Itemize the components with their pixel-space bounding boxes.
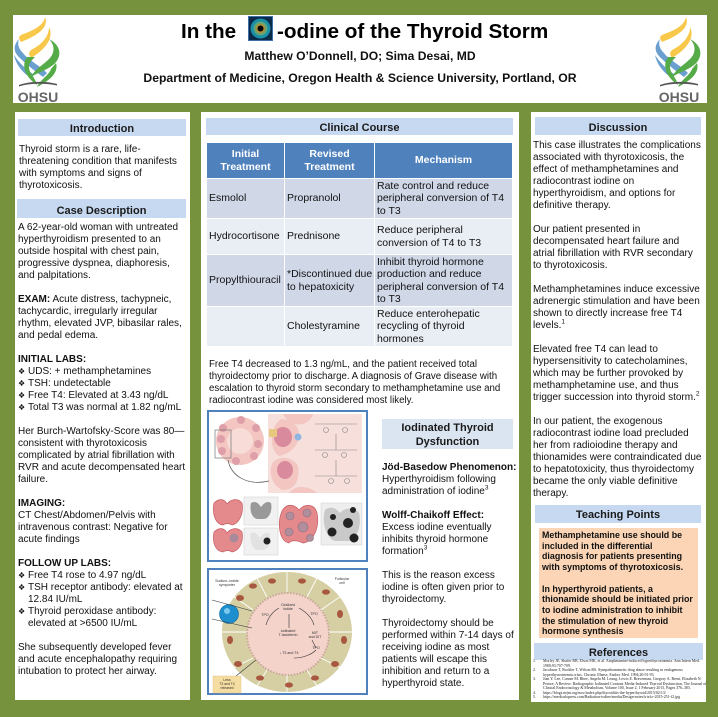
text: case description: CT Chest/Abdomen/Pelvis with (18, 510, 156, 521)
logo: OHSU right (655, 17, 700, 103)
text: introduction: Thyroid storm is a rare, life- (19, 144, 141, 155)
table: treatments: peripheral conversion of T4 (377, 192, 504, 204)
callout: teaching points: thionamide should be initiated prior (542, 594, 693, 604)
table: treatments: Esmolol (209, 192, 246, 204)
header banner (13, 15, 707, 103)
heading: Teaching Points (535, 505, 701, 523)
text: discussion: radiocontrast iodine load precluded (533, 428, 689, 439)
table: treatments: Reduce peripheral (377, 224, 463, 236)
text: case description: acute findings (18, 534, 80, 545)
text: outcome: Free T4 decreased to 1.3 ng/mL, and the patient received total (209, 359, 477, 370)
figure: thyroid hormone synthesis: ↓ T3 and T4 (279, 651, 299, 655)
text: references: 1980;93:707-709. (543, 664, 571, 668)
text: case description: consistent with thyrotoxicosis (18, 438, 147, 449)
figure: thyroid hormone synthesis: Follicular (335, 577, 350, 581)
text: case description: 12.84 IU/mL (28, 594, 82, 605)
text: case description: ❖ (18, 367, 25, 376)
text: discussion: effect of methamphetamines and (533, 164, 678, 175)
table: treatments: to T3 (377, 293, 401, 305)
text: case description: Her Burch-Wartofsky-Score was 80— (18, 426, 184, 437)
text: discussion: associated with thyrotoxicosis, the (533, 152, 684, 163)
text: case description: Thyroid peroxidase antibody: (28, 606, 156, 617)
figure: thyroid hormone synthesis: cell (339, 581, 345, 585)
text: discussion: radiocontrast iodine on (533, 176, 634, 187)
text: case description: ❖ (18, 583, 25, 592)
text: case description: complicated by atrial fibrillation with (18, 450, 175, 461)
text: iodine effects: performed within 7-14 days of (382, 630, 514, 641)
callout: teaching points: In hyperthyroid patients, a (542, 584, 653, 594)
text: references (533, 659, 706, 699)
text: discussion: thionamides were contraindicated due (533, 452, 701, 463)
text: case description: outside hospital with chest pain, (18, 246, 159, 257)
text: iodine effects: receiving iodine as most (382, 642, 489, 653)
text: discussion: methamphetamine use, and thus (533, 380, 679, 391)
text: case description: IMAGING: (18, 498, 65, 509)
panel: right column (531, 112, 706, 702)
text: case description: Total T3 was normal at 1.82 ng/mL (28, 402, 181, 413)
figure: thyroid hormone synthesis: released (220, 686, 234, 690)
table: treatments: peripheral conversion of T4 (377, 280, 504, 292)
text: case description: failure. (18, 474, 48, 485)
text: case description: elevated at >6500 IU/mL (28, 618, 137, 629)
callout: teaching points: with symptoms of thyrotoxicosis. (542, 562, 683, 572)
table: treatments: Treatment (304, 160, 355, 172)
text: case description: UDS: + methamphetamines (28, 366, 151, 377)
heading: Teaching Points: Teaching Points (576, 509, 660, 521)
figure: thyroid hormone synthesis: TPO (312, 646, 320, 650)
text: case description: and pedal edema. (18, 330, 98, 341)
text: introduction (19, 144, 177, 191)
heading: Introduction (18, 119, 186, 136)
callout: teaching points: Methamphetamine use should be (542, 530, 682, 540)
figure: thyroid hormone synthesis (207, 568, 368, 695)
table: treatments: Prednisone (287, 230, 340, 242)
text: iodine effects (382, 462, 516, 689)
text: outcome: thyroidectomy prior to discharge. A diagnosis of Grave disease with (209, 371, 497, 382)
text: discussion: hypersensitivity to catecholamines, (533, 356, 688, 367)
table: treatments: Rate control and reduce (377, 180, 489, 192)
text: iodine effects: Thyroidectomy should be (382, 618, 494, 629)
table: treatments: Treatment (220, 160, 271, 172)
affiliation: Department of Medicine, Oregon Health & Science University, Portland, OR (143, 71, 577, 85)
table: treatments: Propranolol (287, 192, 341, 204)
table: treatments: Revised (309, 148, 350, 160)
icon: iris (248, 16, 273, 41)
text: iodine effects: Jöd-Basedow Phenomenon: (382, 462, 516, 473)
figure: thyroid hormone synthesis: T3 and T4 (219, 682, 235, 686)
table: treatments: Reduce enterohepatic (377, 308, 480, 320)
heading: Clinical Course: Clinical Course (319, 122, 400, 134)
callout: teaching points: included in the differential (542, 541, 652, 551)
figure: thyroid hormone synthesis: iodide (283, 607, 293, 611)
text: iodine effects: thyroidectomy. (382, 594, 446, 605)
text: case description: RVR and acute decompensated heart (18, 462, 185, 473)
text: iodine effects: inhibition and return to a (382, 666, 489, 677)
title: In the (181, 20, 236, 43)
text: discussion: therapy. (533, 488, 568, 499)
text: case description: intubation to protect her airway. (18, 666, 157, 677)
text: discussion: to hepatotoxicity, thus thyroidectomy (533, 464, 694, 475)
text: iodine effects: patients will escape this (382, 654, 487, 665)
text: discussion: definitive therapy. (533, 200, 611, 211)
table: treatments: Inhibit thyroid hormone (377, 256, 484, 268)
text: case description: ❖ (18, 571, 25, 580)
table: treatments: Initial (232, 148, 259, 160)
text: references: 4. (533, 691, 536, 695)
text: outcome: radiocontrast iodine was considered most likely. (209, 395, 413, 406)
table: treatments (207, 143, 512, 346)
text: case description: TSH receptor antibody: elevated at (28, 582, 183, 593)
text: discussion: to thyrotoxicosis. (533, 260, 607, 271)
figure: thyroid hormone synthesis: TPO (310, 612, 318, 616)
text: iodine effects: hyperthyroid state. (382, 678, 464, 689)
text: iodine effects: formation3 (382, 545, 427, 557)
table: treatments: recycling of thyroid (377, 320, 465, 332)
text: iodine effects: administration of iodine3 (382, 485, 488, 497)
text: discussion: atrial fibrillation with RVR secondary (533, 248, 693, 259)
figure: thyroid follicle and scans (207, 410, 368, 562)
figure: thyroid hormone synthesis: Sodium–iodide (215, 579, 239, 583)
text: references: https://blogs.nejm.org/now/index.php/thyroiditis-the-hyperthyroid/2015/02/13/ (543, 691, 666, 695)
text: discussion: became the only viable definitive (533, 476, 678, 487)
callout: teaching points (539, 528, 698, 638)
table: treatments: to T3 (377, 205, 401, 217)
text: introduction: with symptoms and signs of (19, 168, 142, 179)
text: case description: intravenous contrast: Negative for (18, 522, 168, 533)
text: introduction: thyrotoxicosis. (19, 180, 82, 191)
callout: teaching points: hormone synthesis (542, 626, 623, 636)
text: references: 5. (533, 695, 536, 699)
text: case description: EXAM: Acute distress, tachypneic, (18, 294, 171, 305)
text: case description: ❖ (18, 403, 25, 412)
heading: Case Description (17, 199, 186, 218)
text: discussion: shown to directly increase free T4 (533, 308, 682, 319)
text: iodine effects: Wolff-Chaikoff Effect: (382, 510, 484, 521)
text: references: Jian Y. Lee, Connie M. Rhee, Angela M. Leung, Lewis E. Braverman, Gregory A. Brent, Elizabeth N. (543, 677, 702, 681)
text: references: 2. (533, 668, 536, 672)
text: discussion: This case illustrates the complications (533, 140, 701, 151)
text: case description: ❖ (18, 379, 25, 388)
figure: thyroid hormone synthesis: MIT (312, 631, 319, 635)
text: case description: rhythm, elevated JVP, bibasilar rales, (18, 318, 182, 329)
text: iodine effects: Excess iodine eventually (382, 522, 492, 533)
figure: thyroid hormone synthesis: TPO (261, 613, 269, 617)
text: discussion: hyperthyroidism, and options for (533, 188, 675, 199)
table: treatments: hormones (377, 333, 424, 345)
text: case description: She subsequently developed fever (18, 642, 171, 653)
heading: Introduction: Introduction (70, 123, 134, 135)
callout: teaching points: to iodine administration to inhibit (542, 605, 683, 615)
text: references: Morley JE, Shafer RB, Elson MK, et al. Amphetamine-induced hyperthyroxinemia. Ann Intern Med. (543, 659, 700, 663)
text: discussion: adrenergic stimulation and have been (533, 296, 700, 307)
text: references: Clinical Endocrinology & Metabolism, Volume 100, Issue 2, 1 February 2015, Pages 376–383. (543, 686, 691, 690)
text: discussion: Methamphetamines induce excessive (533, 284, 700, 295)
text: case description: INITIAL LABS: (18, 354, 86, 365)
callout: teaching points: the stimulation of new thyroid (542, 616, 668, 626)
text: discussion: her from radioiodine therapy and (533, 440, 678, 451)
text: discussion: which may be further provoked by (533, 368, 683, 379)
text: iodine effects: This is the reason excess (382, 570, 495, 581)
text: discussion: trigger succession into thyroid storm.2 (533, 391, 699, 403)
heading: Iodinated Thyroid Dysfunction: Iodinated Thyroid (401, 422, 494, 434)
text: discussion: levels.1 (533, 319, 565, 331)
table: treatments: production and reduce (377, 268, 482, 280)
text: case description (18, 222, 186, 677)
text: references: 3. (533, 677, 536, 681)
text: outcome (209, 359, 500, 406)
text: case description: hyperthyroidism presented to an (18, 234, 161, 245)
text: iodine effects: inhibits thyroid hormone (382, 534, 488, 545)
text: references: Jacobson T, Rockler T, Wilson RS. Sympathomimetic drug abuse resulting in endogenous (543, 668, 683, 672)
figure: thyroid hormone synthesis: Iodinated (281, 629, 295, 633)
heading: Discussion (535, 117, 701, 135)
text: introduction: threatening condition that manifests (19, 156, 177, 167)
figure: thyroid hormone synthesis: and DIT (309, 635, 322, 639)
heading: References (534, 643, 703, 660)
text: case description: Free T4 rose to 4.97 ng/dL (28, 570, 146, 581)
text: case description: ❖ (18, 391, 25, 400)
figure: thyroid hormone synthesis: symporter (219, 583, 236, 587)
text: discussion: decompensated heart failure and (533, 236, 679, 247)
text: case description: and palpitations. (18, 270, 91, 281)
figure: thyroid hormone synthesis: Oxidized (281, 603, 295, 607)
text: discussion: Elevated free T4 can lead to (533, 344, 658, 355)
figure: thyroid hormone synthesis: T lactoferrin (279, 633, 297, 637)
heading: Clinical Course (206, 118, 513, 135)
table: treatments: *Discontinued due (287, 268, 372, 280)
text: case description: Free T4: Elevated at 3.43 ng/dL (28, 390, 168, 401)
text: iodine effects: iodine is often given prior to (382, 582, 504, 593)
text: case description: progressive dyspnea, diaphoresis, (18, 258, 170, 269)
table: treatments: Hydrocortisone (209, 230, 280, 242)
text: references: https://medicalxpress.com/Radiation-iodine/media/Design-notes/iris/io-2015-251-f2.jpg (543, 695, 680, 699)
heading: Iodinated Thyroid Dysfunction: Dysfunction (416, 436, 479, 448)
text: references: Pearce; A Review: Radiographic Iodinated Contrast Media-Induced Thyroid Dysfunction, The Journal of (543, 682, 706, 686)
text: case description: TSH: undetectable (28, 378, 111, 389)
text: outcome: escalation to thyroid storm secondary to methamphetamine use and (209, 383, 500, 394)
table: treatments: Propylthiouracil (209, 274, 281, 286)
text: discussion: In our patient, the exogenous (533, 416, 663, 427)
table: treatments: Cholestyramine (287, 320, 360, 332)
table: treatments: to hepatoxicity (287, 280, 354, 292)
text: case description: ❖ (18, 607, 25, 616)
title: -odine of the Thyroid Storm (277, 20, 548, 43)
text: discussion (533, 140, 701, 499)
panel: left column (15, 112, 190, 700)
text: case description: tachycardic, irregularly irregular (18, 306, 158, 317)
text: references: hyperthyroxinemia crisis. Chronic Illness. Endocr Med. 1994;20:91-93. (543, 673, 655, 677)
heading: Discussion: Discussion (589, 122, 647, 134)
heading: Iodinated Thyroid Dysfunction (382, 419, 513, 449)
text: discussion: Our patient presented in (533, 224, 640, 235)
text: case description: FOLLOW UP LABS: (18, 558, 111, 569)
table: treatments: conversion of T4 to T3 (377, 236, 481, 248)
authors: Matthew O’Donnell, DO; Sima Desai, MD (244, 49, 476, 63)
text: references: 1. (533, 659, 536, 663)
heading: Case Description: Case Description (57, 205, 146, 217)
figure: thyroid hormone synthesis: Less (223, 678, 231, 682)
logo: OHSU left (14, 17, 60, 103)
callout: teaching points: diagnosis for patients presenting (542, 551, 682, 561)
text: iodine effects: Hyperthyroidism following (382, 474, 496, 485)
table: treatments: Mechanism (415, 154, 472, 166)
text: case description: and acute encephalopathy requiring (18, 654, 177, 665)
heading: References: References (589, 647, 648, 659)
panel: center column (201, 112, 519, 700)
text: case description: A 62-year-old woman with untreated (18, 222, 178, 233)
